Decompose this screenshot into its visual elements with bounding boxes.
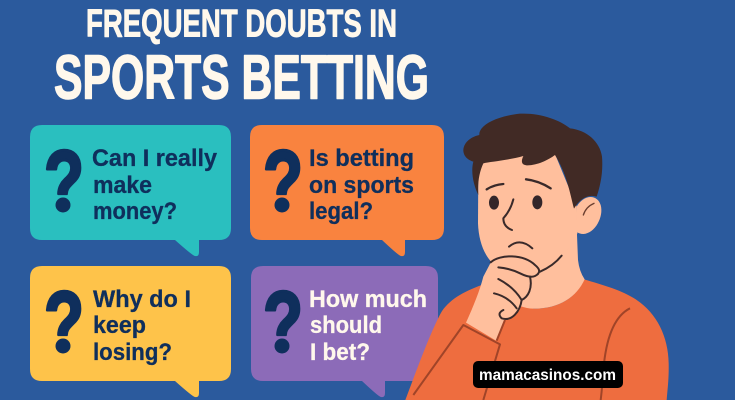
shirt [405, 279, 669, 400]
panel: how much should I bet: I bet? [310, 339, 370, 366]
panel: why do I keep losing: losing? [93, 339, 172, 366]
face details [487, 179, 594, 319]
panel: how much should I bet: How much [309, 286, 427, 313]
panel: why do I keep losing: keep [93, 312, 146, 339]
panel: can I really make money: ? [44, 132, 84, 231]
ear [576, 197, 601, 234]
panel: why do I keep losing [30, 266, 231, 397]
icon: thoughtful man [405, 114, 669, 400]
panel: is betting on sports legal: Is betting [309, 145, 414, 172]
title [54, 2, 429, 112]
panel: how much should I bet [251, 266, 438, 397]
face [478, 150, 577, 272]
panel: is betting on sports legal: ? [263, 132, 303, 231]
panel: can I really make money: make [93, 172, 152, 199]
panel: why do I keep losing: ? [44, 273, 84, 372]
panel: can I really make money: money? [93, 198, 177, 225]
panel: is betting on sports legal: legal? [309, 198, 373, 225]
neck [520, 227, 585, 309]
panel: is betting on sports legal: on sports [309, 172, 414, 199]
panel: how much should I bet: ? [263, 273, 303, 372]
panel: how much should I bet: should [310, 312, 382, 339]
panel: can I really make money: Can I really [92, 145, 217, 172]
sleeve seams [413, 308, 630, 400]
badge: website [473, 361, 623, 388]
badge: website: mamacasinos.com [479, 367, 616, 384]
title: SPORTS BETTING [54, 44, 429, 112]
hand [466, 257, 540, 341]
panel: why do I keep losing: Why do I [93, 286, 191, 313]
panel: is betting on sports legal [250, 125, 444, 256]
panel: can I really make money [30, 125, 231, 256]
title: FREQUENT DOUBTS IN [86, 2, 397, 46]
hair [463, 114, 602, 209]
